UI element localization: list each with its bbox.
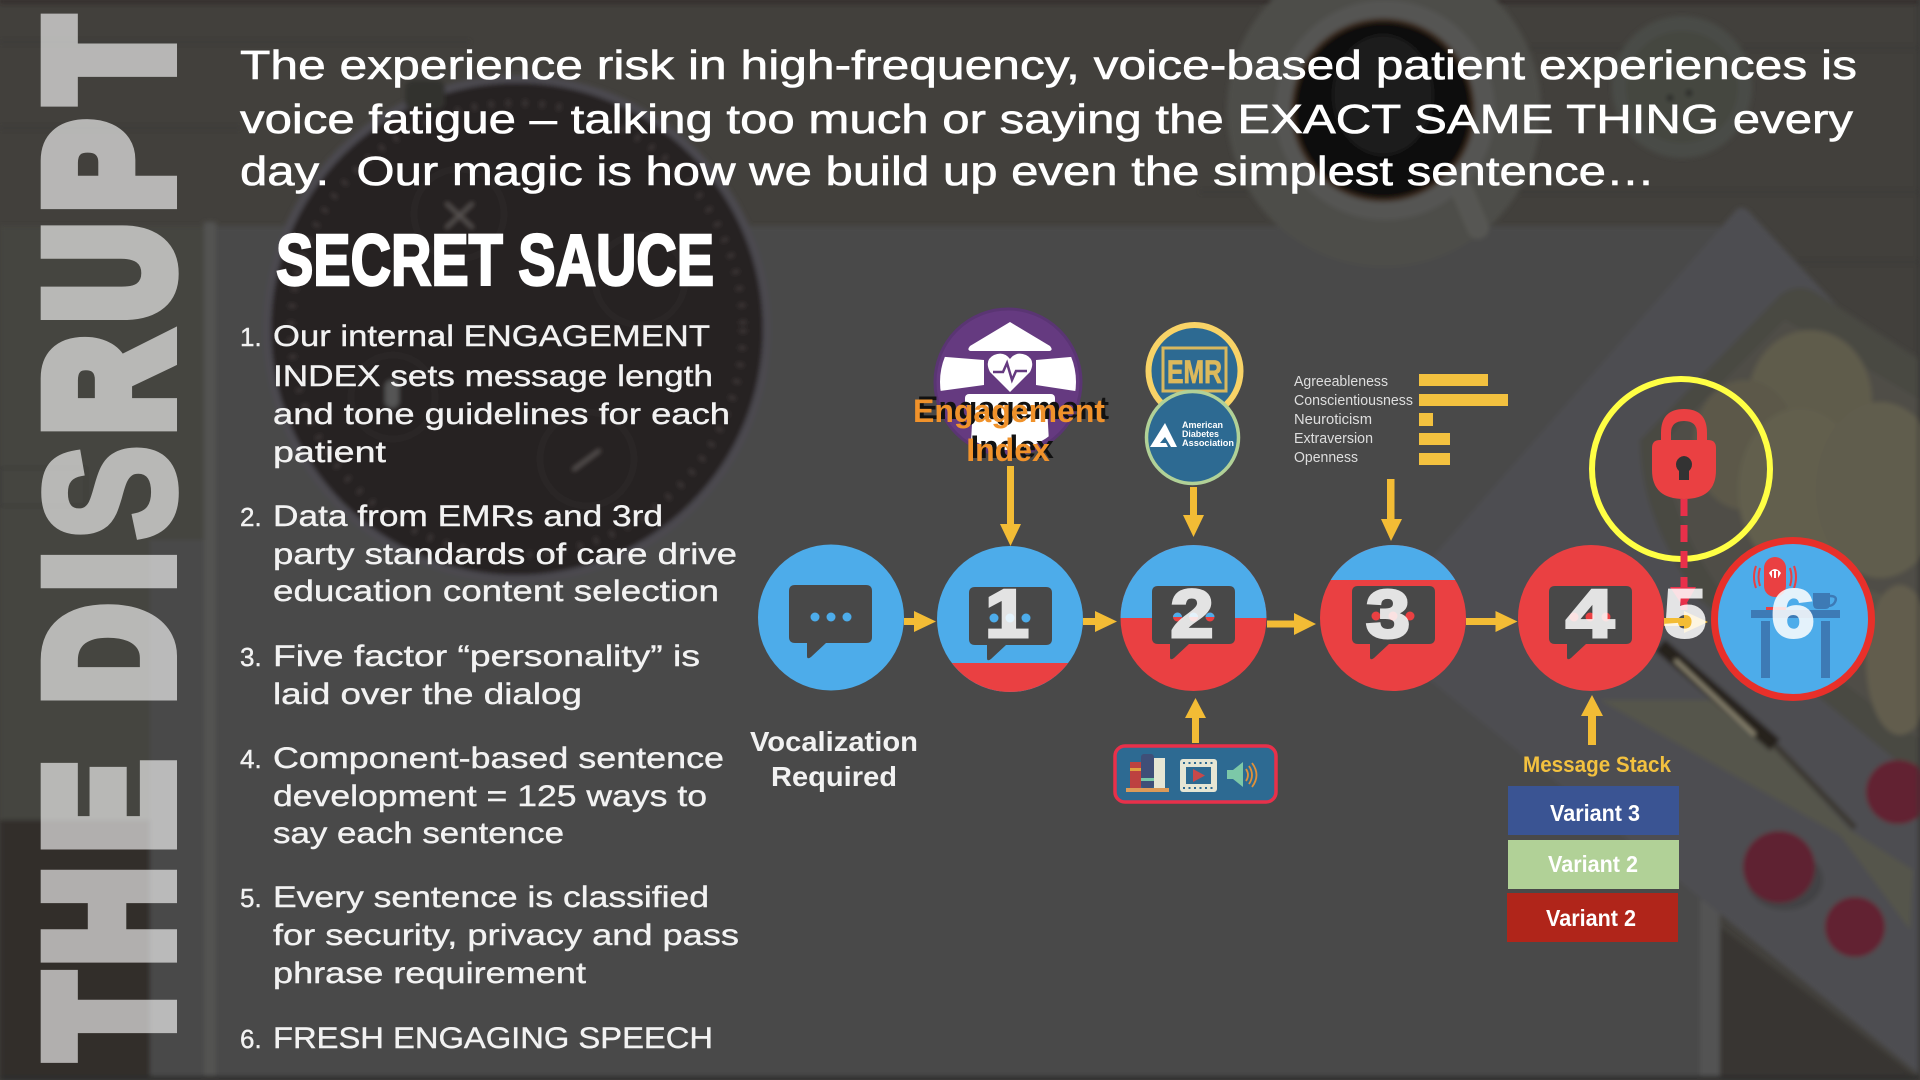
icon: red padlock: [1652, 409, 1716, 499]
label: Engagement Index: [913, 390, 1109, 468]
list item 4: [240, 742, 724, 850]
arrow: vocalization to step 1: [904, 611, 936, 632]
icon: American Diabetes Association badge: Association: [1182, 438, 1234, 449]
flow step 6: fresh engaging speech: [1714, 540, 1872, 698]
list item 1: INDEX sets message length: [273, 360, 713, 393]
chart: five factor personality bars: Agreeableness: [1294, 374, 1388, 390]
list item 2: Data from EMRs and 3rd: [273, 500, 663, 533]
serving plate: [1380, 208, 1920, 1075]
label: Engagement Index: Index: [970, 429, 1054, 465]
list item 1: and tone guidelines for each: [273, 398, 730, 431]
variant card: green: [1508, 840, 1679, 889]
list item 6: FRESH ENGAGING SPEECH: [273, 1022, 713, 1055]
flow step 2: [1120, 545, 1266, 691]
heading: secret sauce: SECRET SAUCE: [276, 221, 714, 301]
numbered list: [240, 320, 739, 1055]
arrow: step 3 to step 4: [1466, 611, 1518, 632]
arrow: personality to step 3: [1381, 479, 1402, 541]
vertical title: THE DISRUPT: RUPT: [12, 19, 205, 433]
icon: film strip: [1180, 759, 1217, 792]
chart: five factor personality bars: Openness: [1294, 450, 1358, 466]
list item 5: phrase requirement: [273, 957, 587, 990]
arrow: content to step 2: [1185, 698, 1206, 743]
list item 2: party standards of care drive: [273, 538, 737, 571]
label: message stack: Message Stack: [1523, 752, 1672, 777]
headline paragraph: The experience risk in high-frequency, voice-based patient experiences is: [240, 42, 1857, 88]
icon: desk with coffee: [1751, 593, 1840, 678]
headline paragraph: voice fatigue – talking too much or saying the EXACT SAME THING every: [240, 96, 1854, 142]
vertical title: THE DISRUPT: [7, 19, 212, 1057]
headline paragraph: day. Our magic is how we build up even the simplest sentence…: [240, 148, 1655, 194]
headline paragraph: [240, 42, 1857, 194]
label: Engagement Index: Engagement: [917, 390, 1109, 426]
arrow: EMR and ADA to step 2: [1183, 487, 1204, 537]
icon: speaker: [1227, 762, 1256, 787]
list item 2: [240, 500, 737, 608]
list item 5: [240, 881, 739, 990]
shaker: [1612, 16, 1752, 158]
list item 4: 4.: [240, 744, 262, 774]
icon: books: [1126, 754, 1169, 792]
utensils: [1600, 700, 1913, 930]
arrow: engagement index to step 1: [1000, 466, 1021, 546]
flow step 2: 2: [1170, 576, 1214, 652]
arrow: message stack to step 4: [1581, 695, 1603, 745]
flow step 1: 1: [985, 576, 1029, 652]
chart: five factor personality bars: Conscientiousness: [1294, 393, 1413, 409]
label: vocalization required: Required: [771, 761, 897, 792]
icon: speech bubble: [789, 585, 872, 658]
variant card: red: Variant 2: [1546, 905, 1636, 931]
label: vocalization required: [750, 726, 918, 792]
label: vocalization required: Vocalization: [750, 726, 918, 757]
flow step 5 number: 5: [1664, 576, 1706, 652]
icon: American Diabetes Association badge: [1146, 392, 1238, 484]
flow step 3: 3: [1366, 576, 1410, 652]
list item 4: say each sentence: [273, 817, 564, 850]
arrow: step 4 to step 6: [1664, 611, 1708, 633]
chart: five factor personality bars: [1294, 374, 1508, 466]
list item 4: Component-based sentence: [273, 742, 724, 775]
label: Engagement Index: Engagement: [913, 393, 1105, 429]
chart: five factor personality bars: Neuroticism: [1294, 412, 1372, 428]
flow step: vocalization required: [758, 544, 904, 690]
list item 5: 5.: [240, 883, 262, 913]
arrow: step 2 to step 3: [1267, 613, 1316, 635]
variant card: blue: Variant 3: [1550, 800, 1640, 826]
vertical title: THE DISRUPT: S: [7, 445, 212, 540]
flow step 4: [1518, 545, 1664, 691]
list item 3: laid over the dialog: [273, 678, 582, 711]
variant card: red: [1507, 893, 1678, 942]
icon: American Diabetes Association badge: American: [1182, 420, 1223, 431]
list item 2: education content selection: [273, 575, 719, 608]
list item 6: 6.: [240, 1024, 262, 1054]
list item 5: Every sentence is classified: [273, 881, 709, 914]
vertical title: THE DISRUPT: THEDI: [12, 553, 205, 1057]
list item 2: 2.: [240, 502, 262, 532]
icon: smart speaker sound: [1754, 557, 1796, 610]
icon: engagement index lighthouse: [933, 309, 1082, 460]
flow step 4: 4: [1566, 576, 1614, 652]
list item 3: 3.: [240, 642, 262, 672]
icon: American Diabetes Association badge: Diabetes: [1182, 429, 1219, 440]
flow step 6: fresh engaging speech: 6: [1772, 576, 1814, 652]
list item 1: 1.: [240, 322, 262, 352]
saucer and cup: [1227, 0, 1541, 267]
flow step 3: [1320, 545, 1466, 691]
highlight ring around security lock: [1592, 379, 1770, 559]
list item 3: [240, 640, 700, 711]
arrow: dashed security line into step 5: [1670, 499, 1696, 610]
smart speaker: [263, 75, 771, 583]
list item 1: [240, 320, 730, 469]
list item 3: Five factor “personality” is: [273, 640, 700, 673]
chart: five factor personality bars: Extraversion: [1294, 431, 1373, 447]
variant card: green: Variant 2: [1548, 851, 1638, 877]
icon: EMR badge: EMR: [1167, 354, 1222, 390]
raspberries: [1747, 850, 1823, 910]
list item 5: for security, privacy and pass: [273, 919, 739, 952]
list item 4: development = 125 ways to: [273, 780, 707, 813]
arrow: step 1 to step 2: [1083, 611, 1117, 632]
bowl with bananas: [1640, 288, 1920, 780]
label: Engagement Index: Index: [966, 432, 1050, 468]
panel: media content icons: [1115, 746, 1276, 802]
list item 1: Our internal ENGAGEMENT: [273, 320, 710, 353]
list item 1: patient: [273, 436, 387, 469]
icon: EMR badge: [1148, 325, 1240, 417]
flow step 1: [937, 546, 1083, 692]
variant card: blue: [1508, 786, 1679, 835]
